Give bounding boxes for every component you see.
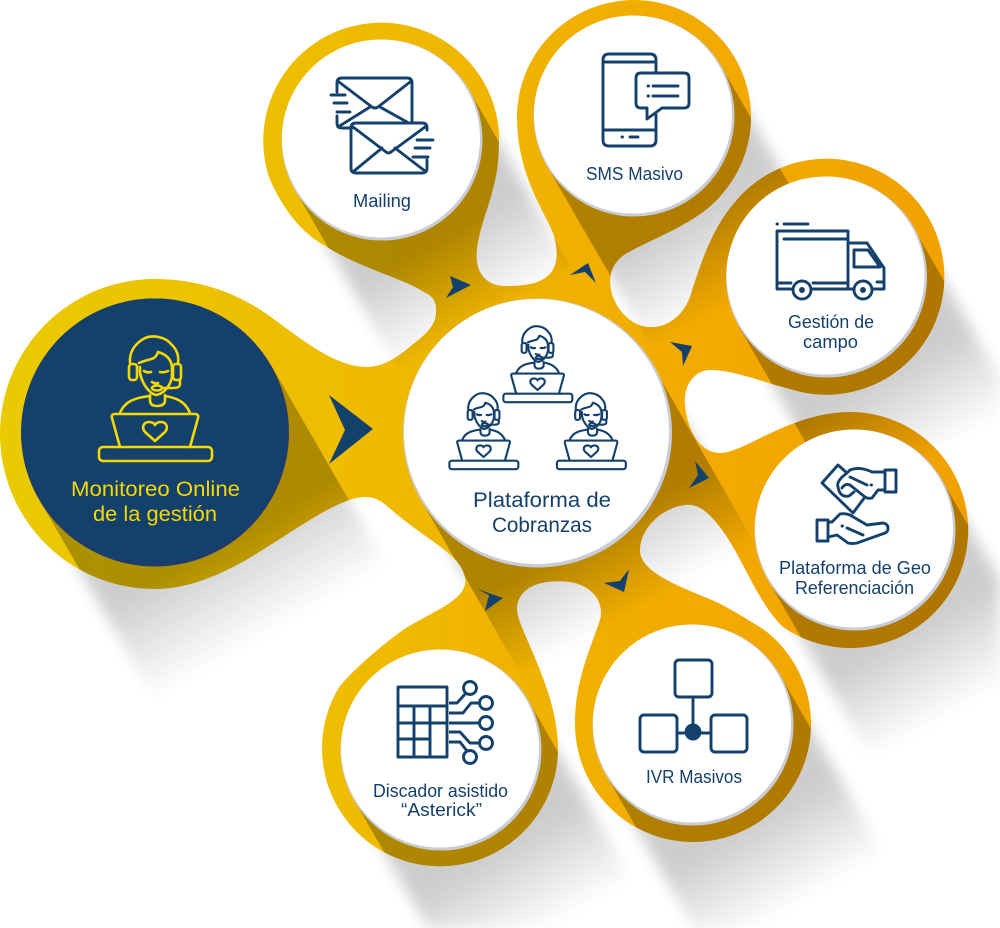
label: campo: campo [803, 332, 858, 352]
label: Mailing: Mailing [353, 191, 411, 211]
icon: phone with chat bubble [603, 54, 689, 146]
arrow: to mailing [446, 276, 471, 298]
icon: delivery truck [777, 224, 884, 299]
arrow: to geo referencing [689, 461, 709, 488]
icon: yellow agent [99, 336, 212, 461]
icon: three agents [449, 326, 626, 469]
label: Discador asistido: Discador asistido [373, 781, 508, 801]
panel: Gestion de campo [726, 176, 927, 378]
label: SMS Masivo: SMS Masivo [586, 164, 683, 184]
panel: Plataforma de Cobranzas [403, 298, 672, 568]
arrow: to SMS [570, 263, 596, 283]
dark long shadows on the blob [42, 70, 968, 866]
icon: network boxes [640, 660, 747, 752]
panel: IVR Masivos [592, 624, 794, 826]
icon: envelopes [331, 78, 433, 173]
icon: dialer with circuit [398, 682, 492, 764]
label: Plataforma de Geo: Plataforma de Geo [779, 558, 931, 578]
arrow: to IVR [604, 569, 629, 592]
panel: Discador asistido [340, 650, 542, 850]
panel: SMS Masivo [534, 16, 734, 216]
panel: Plataforma de Geo Referenciacion [754, 430, 956, 630]
panel: Monitoreo Online [21, 298, 289, 566]
label: Cobranzas: Cobranzas [492, 514, 592, 537]
arrow: monitoring to platform [329, 395, 373, 464]
label: Referenciacion: Referenciación [795, 578, 914, 598]
label: Asterick: “Asterick” [401, 800, 482, 820]
label: de la gestion: de la gestión [93, 503, 217, 526]
arrow: to field management [670, 342, 692, 366]
label: Gestion de: Gestión de [788, 312, 874, 332]
icon: hands and banknote [817, 465, 896, 544]
arrow: to dialer [477, 589, 503, 611]
label: Plataforma de: Plataforma de [473, 489, 611, 512]
panel: Mailing [282, 40, 482, 240]
label: Monitoreo Online: Monitoreo Online [71, 478, 240, 501]
label: IVR Masivos: IVR Masivos [646, 767, 742, 787]
